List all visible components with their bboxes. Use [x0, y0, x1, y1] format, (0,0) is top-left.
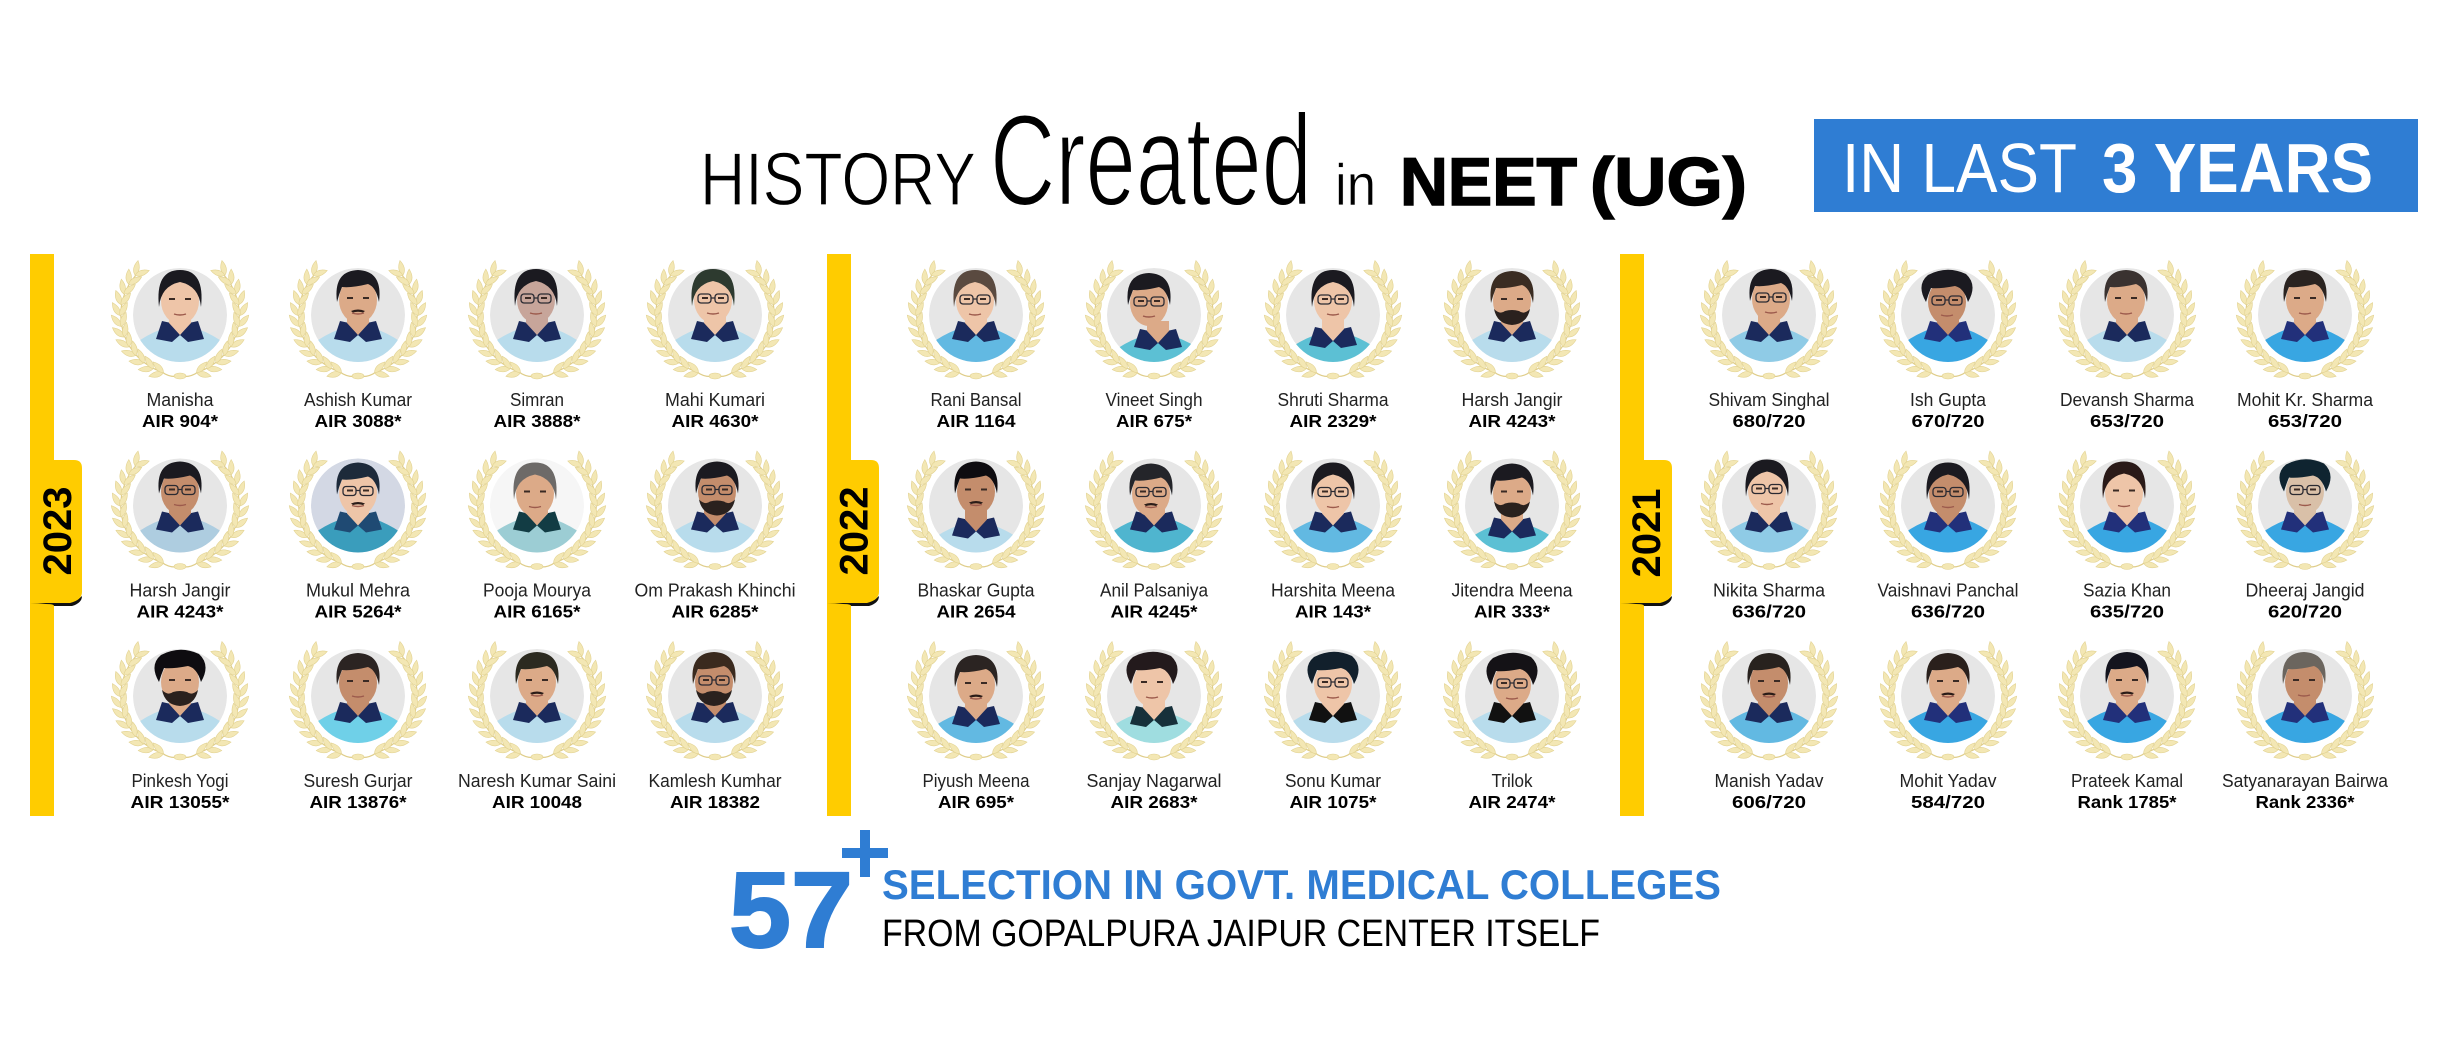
name: Bhaskar Gupta — [918, 580, 1035, 600]
card: Sanjay Nagarwal — [1083, 639, 1225, 812]
rank: 680/720 — [1732, 411, 1806, 431]
wreath — [644, 448, 786, 573]
rank: AIR 18382 — [670, 792, 760, 812]
portrait — [133, 649, 227, 743]
portrait — [133, 268, 227, 362]
card: Vineet Singh — [1083, 258, 1225, 431]
rank: AIR 2474* — [1468, 792, 1556, 812]
rank: AIR 4245* — [1110, 602, 1198, 622]
portrait — [1901, 458, 1995, 552]
rank: AIR 2654 — [936, 602, 1016, 622]
card: Harsh Jangir (2022) — [1441, 258, 1583, 431]
name: Ish Gupta — [1910, 390, 1987, 410]
name: Harshita Meena — [1271, 580, 1396, 600]
wreath — [2234, 258, 2376, 383]
wreath — [644, 258, 786, 383]
portrait — [929, 268, 1023, 362]
wreath — [1083, 448, 1225, 573]
portrait — [311, 268, 405, 362]
portrait — [1901, 268, 1995, 362]
rank: AIR 10048 — [492, 792, 582, 812]
card: Harshita Meena — [1262, 448, 1404, 622]
card: Manish Yadav — [1698, 639, 1840, 812]
title: (UG) — [1590, 144, 1747, 220]
name: Shruti Sharma — [1278, 390, 1389, 410]
rank: AIR 4243* — [136, 602, 224, 622]
wreath — [1083, 258, 1225, 383]
rank: AIR 4630* — [672, 411, 759, 431]
wreath — [1441, 258, 1583, 383]
name: Vaishnavi Panchal — [1878, 580, 2018, 600]
wreath — [905, 448, 1047, 573]
portrait — [1286, 649, 1380, 743]
name: Naresh Kumar Saini — [458, 771, 616, 791]
name: Shivam Singhal — [1708, 390, 1830, 410]
portrait — [1286, 268, 1380, 368]
card: Trilok — [1441, 639, 1583, 812]
infographic canvas — [30, 112, 2418, 949]
portrait — [668, 268, 762, 362]
card: Dheeraj Jangid — [2234, 448, 2376, 622]
card: Manisha — [109, 258, 251, 431]
wreath — [287, 448, 429, 573]
rank: AIR 1075* — [1290, 792, 1377, 812]
name: Mohit Kr. Sharma — [2237, 390, 2374, 410]
portrait — [1107, 649, 1201, 747]
portrait — [2258, 649, 2352, 743]
card: Ashish Kumar — [287, 258, 429, 431]
card: Pooja Mourya — [466, 448, 608, 622]
portrait — [1286, 458, 1380, 552]
card: Bhaskar Gupta — [905, 448, 1047, 622]
name: Ashish Kumar — [304, 390, 412, 410]
rank: AIR 4243* — [1468, 411, 1556, 431]
year label 2023: 2023 — [36, 487, 80, 575]
name: Mohit Yadav — [1900, 771, 1996, 791]
wreath — [1698, 258, 1840, 383]
card: Mohit Yadav — [1877, 639, 2019, 812]
wreath — [1877, 639, 2019, 764]
card: Harsh Jangir (2023) — [109, 448, 251, 622]
rank: AIR 675* — [1116, 411, 1192, 431]
rank: AIR 1164 — [937, 411, 1016, 431]
portrait — [2080, 649, 2174, 743]
portrait — [1465, 649, 1559, 743]
portrait — [311, 649, 405, 743]
title: NEET — [1400, 144, 1577, 220]
portrait — [1465, 268, 1559, 362]
portrait — [1107, 268, 1201, 362]
wreath — [1877, 258, 2019, 383]
title — [700, 87, 1747, 233]
card: Sazia Khan — [2056, 448, 2198, 622]
name: Vineet Singh — [1106, 390, 1202, 410]
rank: 635/720 — [2090, 602, 2164, 622]
wreath — [466, 639, 608, 764]
rank: 620/720 — [2268, 602, 2342, 622]
rank: Rank 2336* — [2256, 792, 2355, 812]
name: Harsh Jangir — [1462, 390, 1562, 410]
portrait — [929, 649, 1023, 747]
wreath — [1262, 639, 1404, 764]
name: Pooja Mourya — [483, 580, 592, 600]
name: Pinkesh Yogi — [132, 771, 228, 791]
portrait — [1722, 649, 1816, 743]
portrait — [1465, 458, 1559, 558]
panel: 2021 year bar — [1620, 254, 1672, 816]
portrait — [490, 649, 584, 743]
name: Rani Bansal — [930, 390, 1022, 410]
rank: AIR 13055* — [130, 792, 230, 812]
card: Prateek Kamal — [2056, 639, 2198, 812]
rank: AIR 2683* — [1110, 792, 1198, 812]
rank: AIR 6165* — [494, 602, 581, 622]
name: Trilok — [1492, 771, 1533, 791]
card: Anil Palsaniya — [1083, 448, 1225, 622]
card: Shruti Sharma — [1262, 258, 1404, 431]
name: Satyanarayan Bairwa — [2222, 771, 2389, 791]
wreath — [109, 258, 251, 383]
name: Manish Yadav — [1714, 771, 1824, 791]
wreath — [2234, 448, 2376, 573]
wreath — [2234, 639, 2376, 764]
name: Nikita Sharma — [1713, 580, 1826, 600]
card: Mahi Kumari — [644, 258, 786, 431]
rank: AIR 904* — [142, 411, 218, 431]
card: Pinkesh Yogi — [109, 639, 251, 812]
name: Kamlesh Kumhar — [648, 771, 782, 791]
portrait — [929, 458, 1023, 558]
rank: AIR 333* — [1474, 602, 1550, 622]
selection line: SELECTION IN GOVT. MEDICAL COLLEGES — [882, 861, 1721, 908]
card: Naresh Kumar Saini — [458, 639, 616, 812]
badge: in last 3 years — [1814, 119, 2418, 212]
title: HISTORY — [700, 137, 976, 221]
name: Piyush Meena — [922, 771, 1030, 791]
wreath — [109, 448, 251, 573]
name: Sonu Kumar — [1285, 771, 1381, 791]
card: Devansh Sharma — [2056, 258, 2198, 431]
portrait — [668, 649, 762, 743]
wreath — [2056, 639, 2198, 764]
badge: in last 3 years: IN LAST — [1842, 129, 2077, 207]
wreath — [1262, 448, 1404, 573]
rank: AIR 6285* — [672, 602, 759, 622]
wreath — [2056, 448, 2198, 573]
rank: 653/720 — [2268, 411, 2342, 431]
title: in — [1335, 153, 1376, 218]
rank: AIR 3088* — [314, 411, 402, 431]
portrait — [1901, 649, 1995, 743]
name: Anil Palsaniya — [1100, 580, 1209, 600]
name: Mukul Mehra — [306, 580, 411, 600]
card: Suresh Gurjar — [287, 639, 429, 812]
portrait — [133, 458, 227, 552]
wreath — [2056, 258, 2198, 383]
name: Devansh Sharma — [2060, 390, 2195, 410]
panel: 2022 year bar — [827, 254, 879, 816]
name: Suresh Gurjar — [304, 771, 413, 791]
portrait — [2258, 268, 2352, 362]
portrait — [311, 458, 405, 552]
title: Created — [990, 87, 1312, 233]
wreath — [287, 258, 429, 383]
card: Nikita Sharma — [1698, 448, 1840, 622]
wreath — [1877, 448, 2019, 573]
name: Harsh Jangir — [130, 580, 230, 600]
card: Jitendra Meena — [1441, 448, 1583, 622]
portrait — [2258, 458, 2352, 552]
callout: 57+ selections — [729, 830, 1721, 970]
portrait — [1722, 268, 1816, 362]
name: Prateek Kamal — [2071, 771, 2183, 791]
card: Piyush Meena — [905, 639, 1047, 812]
panel: 2023 year bar — [30, 254, 82, 816]
rank: AIR 695* — [938, 792, 1014, 812]
rank: 584/720 — [1911, 792, 1985, 812]
big number 57: 57 — [729, 849, 853, 970]
card: Satyanarayan Bairwa — [2222, 639, 2389, 812]
portrait — [1107, 458, 1201, 552]
name: Sazia Khan — [2083, 580, 2171, 600]
name: Mahi Kumari — [665, 390, 765, 410]
wreath — [1441, 448, 1583, 573]
year label 2021: 2021 — [1625, 489, 1669, 577]
wreath — [109, 639, 251, 764]
badge: in last 3 years: 3 YEARS — [2102, 129, 2373, 207]
portrait — [490, 268, 584, 362]
wreath — [1698, 448, 1840, 573]
card: Kamlesh Kumhar — [644, 639, 786, 812]
wreath — [1698, 639, 1840, 764]
rank: AIR 143* — [1295, 602, 1371, 622]
center line: FROM GOPALPURA JAIPUR CENTER ITSELF — [882, 913, 1600, 955]
name: Jitendra Meena — [1452, 580, 1573, 600]
card: Shivam Singhal — [1698, 258, 1840, 431]
rank: Rank 1785* — [2078, 792, 2177, 812]
portrait — [1722, 458, 1816, 552]
name: Sanjay Nagarwal — [1086, 771, 1222, 791]
rank: 636/720 — [1732, 602, 1806, 622]
wreath — [1441, 639, 1583, 764]
card: Simran — [466, 258, 608, 431]
wreath — [905, 258, 1047, 383]
wreath — [1083, 639, 1225, 764]
rank: 606/720 — [1732, 792, 1806, 812]
wreath — [466, 448, 608, 573]
portrait — [668, 458, 762, 552]
card: Mohit Kr. Sharma — [2234, 258, 2376, 431]
plus sign — [842, 830, 888, 877]
wreath — [287, 639, 429, 764]
name: Om Prakash Khinchi — [634, 580, 796, 600]
card: Mukul Mehra — [287, 448, 429, 622]
wreath — [1262, 258, 1404, 383]
portrait — [2080, 268, 2174, 362]
name: Dheeraj Jangid — [2246, 580, 2364, 600]
card: Sonu Kumar — [1262, 639, 1404, 812]
name: Simran — [510, 390, 564, 410]
wreath — [466, 258, 608, 383]
rank: 653/720 — [2090, 411, 2164, 431]
card: Rani Bansal — [905, 258, 1047, 431]
portrait — [2080, 458, 2174, 552]
card: Vaishnavi Panchal — [1877, 448, 2019, 622]
wreath — [644, 639, 786, 764]
rank: 636/720 — [1911, 602, 1985, 622]
year label 2022: 2022 — [832, 487, 876, 575]
rank: 670/720 — [1912, 411, 1985, 431]
portrait — [490, 458, 584, 552]
rank: AIR 13876* — [310, 792, 407, 812]
name: Manisha — [146, 390, 214, 410]
card: Om Prakash Khinchi — [634, 448, 796, 622]
rank: AIR 2329* — [1290, 411, 1377, 431]
rank: AIR 3888* — [494, 411, 581, 431]
rank: AIR 5264* — [314, 602, 402, 622]
wreath — [905, 639, 1047, 764]
card: Ish Gupta — [1877, 258, 2019, 431]
